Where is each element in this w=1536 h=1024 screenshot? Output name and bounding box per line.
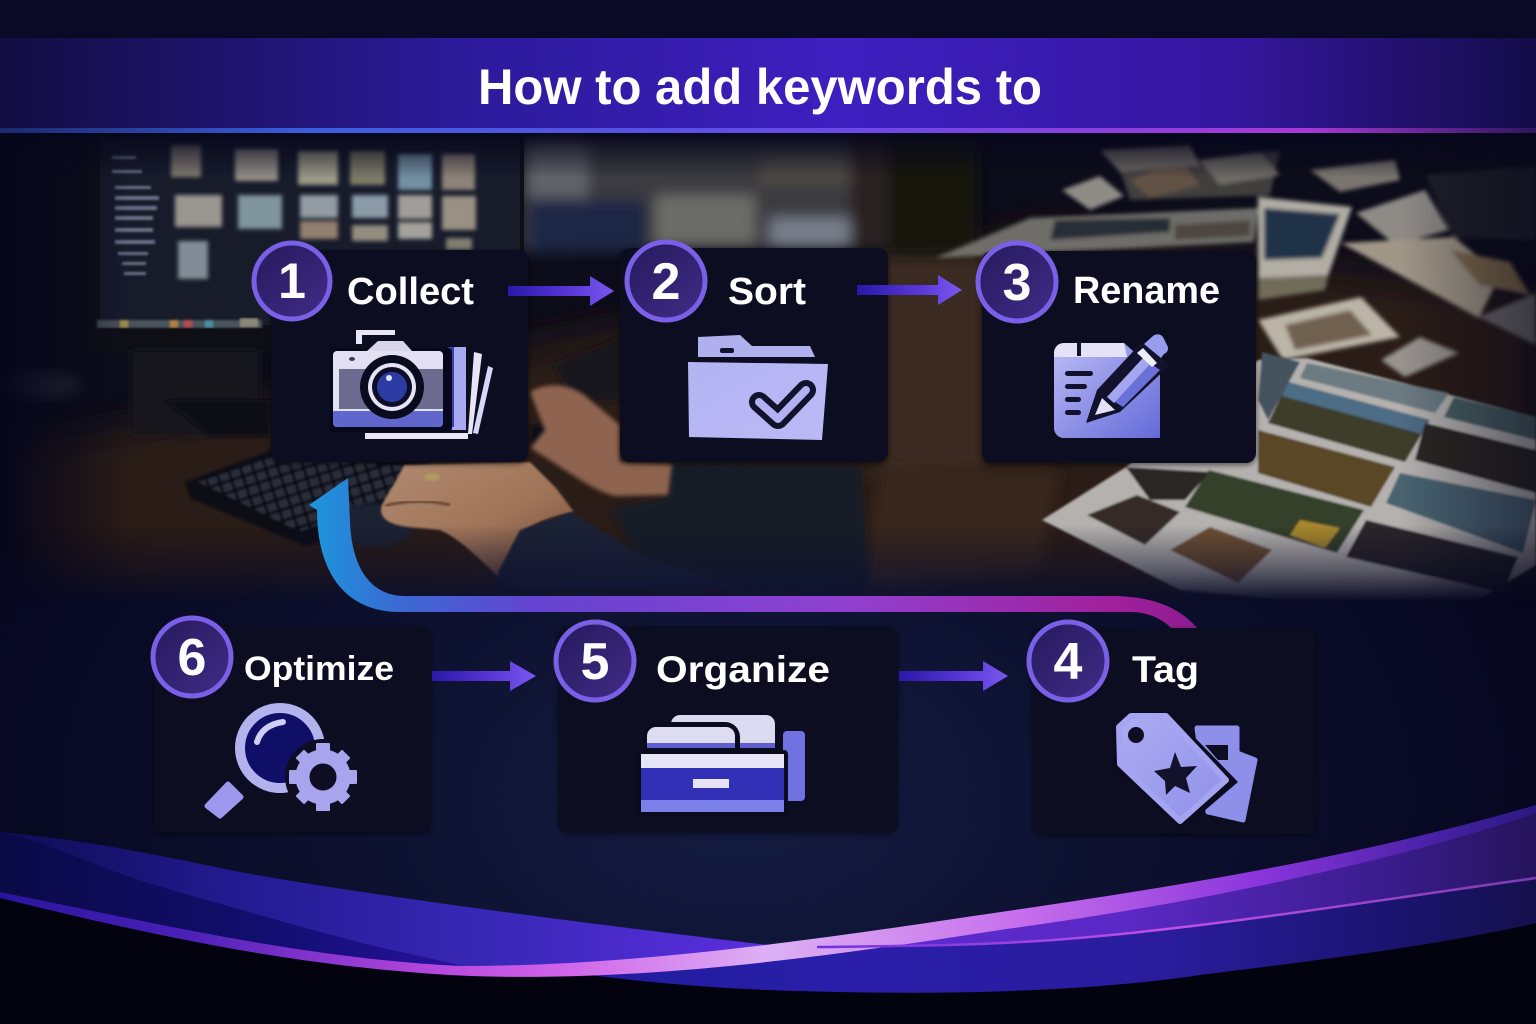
badge 4 [1029,622,1107,700]
photo: keyboard [185,340,620,547]
card 2 [620,248,888,462]
panel: step 3 Rename [978,243,1256,463]
photo: printed sheets, bottom right [1042,352,1536,600]
top strip above header [0,0,1536,38]
panel: step 2 Sort [620,242,888,462]
panel: step 6 Optimize [153,618,431,832]
arrow: Sort to Rename [857,275,962,305]
header underline [0,128,1536,133]
label: Organize: Organize [656,649,830,690]
icon: folder with check [688,335,828,440]
monitor thumbnail grid [171,145,476,279]
photo base: desk surface [24,206,1536,587]
header band [0,38,1536,129]
badge 1 [254,243,330,319]
panel: step 1 Collect [254,243,528,462]
label: Rename: Rename [1073,270,1220,312]
card 4 [1032,628,1315,834]
panel: step 5 Organize [556,622,898,832]
photo: blurred office background [520,135,978,255]
bottom waves [0,805,1536,1024]
arrow: Optimize to Organize [432,661,536,691]
card 6 [154,626,431,832]
wave: dark crease band [0,832,470,972]
photo: scattered prints, top [935,145,1536,377]
card 5 [558,626,898,832]
badge 6 [153,618,231,696]
card 1 [271,250,528,462]
monitor taskbar [97,318,262,328]
title: How to add keywords to [478,59,1042,115]
wave: purple band above thin line [800,812,1536,948]
arrow: Organize to Tag [899,661,1008,691]
badge 6: 6 [178,629,206,687]
badge 2: 2 [652,253,680,311]
badge 3: 3 [1003,254,1031,312]
loop arrow from Tag back to Collect [309,478,1197,632]
wave: lower right band [540,812,1536,993]
icon: price tag with star [1112,712,1255,830]
label: Sort: Sort [728,271,806,313]
badge 2 [627,242,705,320]
photo fades [0,133,1536,620]
badge 3 [978,243,1056,321]
wave: bright stripe [0,805,1536,977]
badge 5 [556,622,634,700]
label: Optimize: Optimize [244,650,394,688]
dark floor below the waves [0,892,1536,1024]
monitor sidebar text [112,156,159,275]
panel: step 4 Tag [1029,622,1315,834]
icon: magnifier with gear [207,708,361,816]
badge 5: 5 [581,633,609,691]
icon: camera with photos [330,330,493,439]
badge 4: 4 [1054,633,1083,691]
label: Tag: Tag [1132,649,1199,690]
wave: thin magenta line [817,878,1536,947]
label: Collect: Collect [347,271,474,313]
wave: upper left band [0,832,768,972]
icon: file drawer [636,715,805,816]
card 3 [982,251,1256,463]
icon: notepad and pencil [1054,334,1170,438]
background photo: desk with monitor, hands and printed photos [0,133,1536,620]
photo: hands and sleeves [381,385,870,590]
arrow: Collect to Sort [508,276,614,306]
badge 1: 1 [278,253,306,309]
photo: monitor [84,135,524,436]
